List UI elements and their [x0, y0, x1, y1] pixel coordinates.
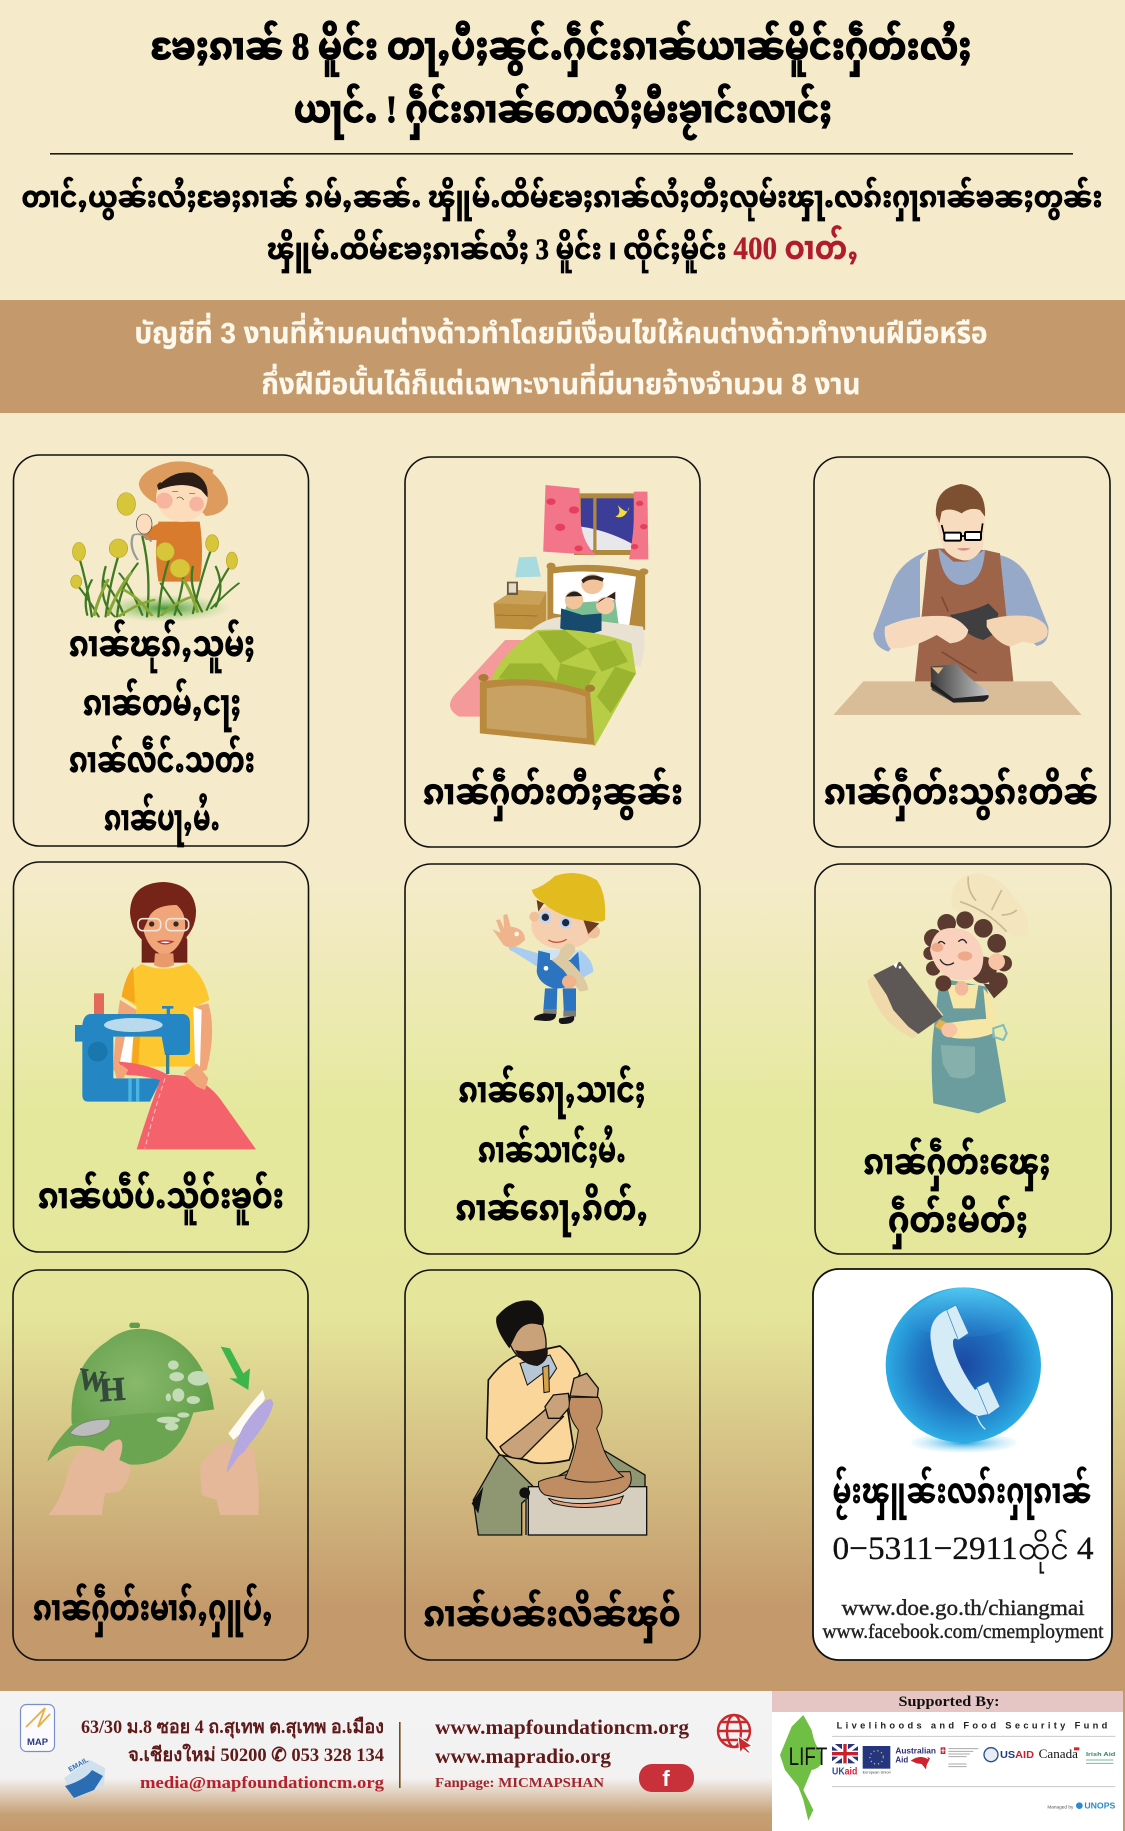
icon: LIFT map: Australian [895, 1746, 936, 1755]
label: ၵၢၼ်ႁဵတ်းတီႈၼွၼ်း [423, 767, 683, 821]
address [81, 1716, 385, 1792]
title: ယႃင်ႉ ! ႁဵင်းၵၢၼ်တေလႆႈမီးၶႂၢင်းလၢင်ႈ [294, 83, 832, 140]
icon: LIFT map: Irish Aid [1086, 1752, 1116, 1758]
websites: www.mapradio.org [435, 1744, 612, 1768]
icon: potter at wheel [472, 1300, 648, 1536]
panel: farming [14, 455, 308, 847]
icon: LIFT map: UKaid [832, 1767, 857, 1778]
icon: email envelope [64, 1756, 105, 1799]
label: ၵၢၼ်သၢင်ႈမႆႉ [478, 1125, 626, 1170]
subtitle text block [22, 176, 1102, 273]
websites [822, 1595, 1104, 1643]
label: ၵၢၼ်ၵေႃႇၵိတ်ႇ [456, 1183, 648, 1237]
label: ၵၢၼ်ပၼ်းလိၼ်ၾဝ် [424, 1589, 680, 1643]
icon: LIFT map: Managed by [1047, 1804, 1074, 1809]
panel: supporters [772, 1691, 1123, 1831]
icon: hands brushing a green cap [47, 1322, 274, 1515]
icon: chef with cleaver [868, 874, 1018, 1114]
icon: hands brushing a green cap: H [98, 1371, 126, 1409]
icon: email envelope: EMAIL [68, 1756, 90, 1774]
websites: Fanpage: MICMAPSHAN [435, 1776, 604, 1791]
icon: LIFT map: UNOPS [1084, 1801, 1116, 1811]
icon: LIFT map: USAID [1000, 1750, 1034, 1761]
address: 63/30 ม.8 ซอย 4 ถ.สุเทพ ต.สุเทพ อ.เมือง [81, 1716, 384, 1739]
icon: globe [718, 1715, 752, 1753]
websites: www.facebook.com/cmemployment [822, 1621, 1104, 1643]
icon: MAP logo [20, 1704, 54, 1752]
address: จ.เชียงใหม่ 50200 ✆ 053 328 134 [128, 1743, 384, 1766]
icon: facebook: f [662, 1766, 670, 1791]
title: ၶႄႈၵၢၼ် 8 မိူင်း တႃႇပီႈၼွင်ႉႁဵင်းၵၢၼ်ယၢၼ်မိူင်းႁဵတ်းလႆႈ [150, 20, 972, 77]
icon: facebook [639, 1764, 694, 1792]
label [456, 1065, 648, 1237]
websites: www.mapfoundationcm.org [435, 1715, 690, 1739]
icon: seamstress at sewing machine [75, 882, 256, 1150]
icon: LIFT map: Canada [1039, 1747, 1078, 1761]
panel: construction [405, 864, 700, 1254]
icon: LIFT map: Livelihoods and Food Security Fund [837, 1720, 1108, 1730]
icon: LIFT map [780, 1715, 1116, 1820]
icon: hands brushing a green cap: W [76, 1362, 108, 1399]
panel: shoemaking [814, 457, 1110, 847]
label: ၵၢၼ်ယဵပ်ႉသိူဝ်းၶူဝ်း [38, 1171, 284, 1225]
phone number: 0−5311−2911ထိုင် 4 [832, 1529, 1094, 1574]
label: ၵၢၼ်ၵေႃႇသၢင်ႈ [458, 1065, 646, 1119]
label: ၵၢၼ်ႁဵတ်းၾေႈ [864, 1137, 1050, 1191]
address: media@mapfoundationcm.org [140, 1773, 385, 1792]
panel: pottery [405, 1270, 700, 1660]
label: ႁဵတ်းမိတ်ႈ [888, 1195, 1028, 1249]
icon: MAP logo: MAP [27, 1737, 49, 1748]
panel: contact [813, 1269, 1112, 1660]
label: ၵၢၼ်ပႃႇမႆႉ [104, 793, 220, 847]
icon: LIFT map: European Union [863, 1770, 891, 1774]
icon: LIFT map: Aid [895, 1755, 908, 1764]
icon: farmer in rice field [70, 461, 240, 621]
thai banner: บัญชีที่ 3 งานที่ห้ามคนต่างด้าวทำโดยมีเงื่อนไขให้คนต่างด้าวทำงานฝีมือหรือ [134, 312, 988, 350]
thai banner [0, 300, 1125, 413]
subtitle text block: ၾိူမ်ႉထိမ်ၶႄႈၵၢၼ်လႆႈ 3 မိူင်း ၊ ၸိုင်ႈမိူင်း 400 ဝၢတ်ႇ [267, 225, 859, 273]
footer [0, 1691, 772, 1831]
websites [435, 1715, 690, 1791]
label: ၵၢၼ်တမ်ႇငႃႈ [83, 678, 241, 732]
panel: cooking [815, 864, 1111, 1254]
icon: shoemaker [834, 484, 1082, 715]
title [150, 20, 972, 140]
icon: blue phone ball [886, 1287, 1041, 1452]
panel: sewing [14, 862, 308, 1252]
label [864, 1137, 1050, 1249]
icon: LIFT map: LIFT [789, 1744, 827, 1771]
websites: www.doe.go.th/chiangmai [842, 1595, 1084, 1620]
label: ၵၢၼ်လဵင်ႉသတ်း [69, 735, 255, 780]
icon: family in bed [450, 485, 648, 746]
icon: builder in helmet [492, 873, 606, 1024]
panel: supporters: Supported By: [898, 1694, 1000, 1710]
label [69, 619, 255, 847]
label: ၵၢၼ်ႁဵတ်းမၢၵ်ႇႁူပ်ႇ [33, 1583, 273, 1637]
thai banner: กึ่งฝีมือนั้นได้ก็แต่เฉพาะงานที่มีนายจ้างจำนวน 8 งาน [262, 363, 860, 401]
label: ၵၢၼ်ၽုၵ်ႇသူမ်ႈ [69, 619, 255, 673]
panel: cleaning cap [13, 1270, 308, 1660]
panel: bedroom housework [405, 457, 700, 847]
